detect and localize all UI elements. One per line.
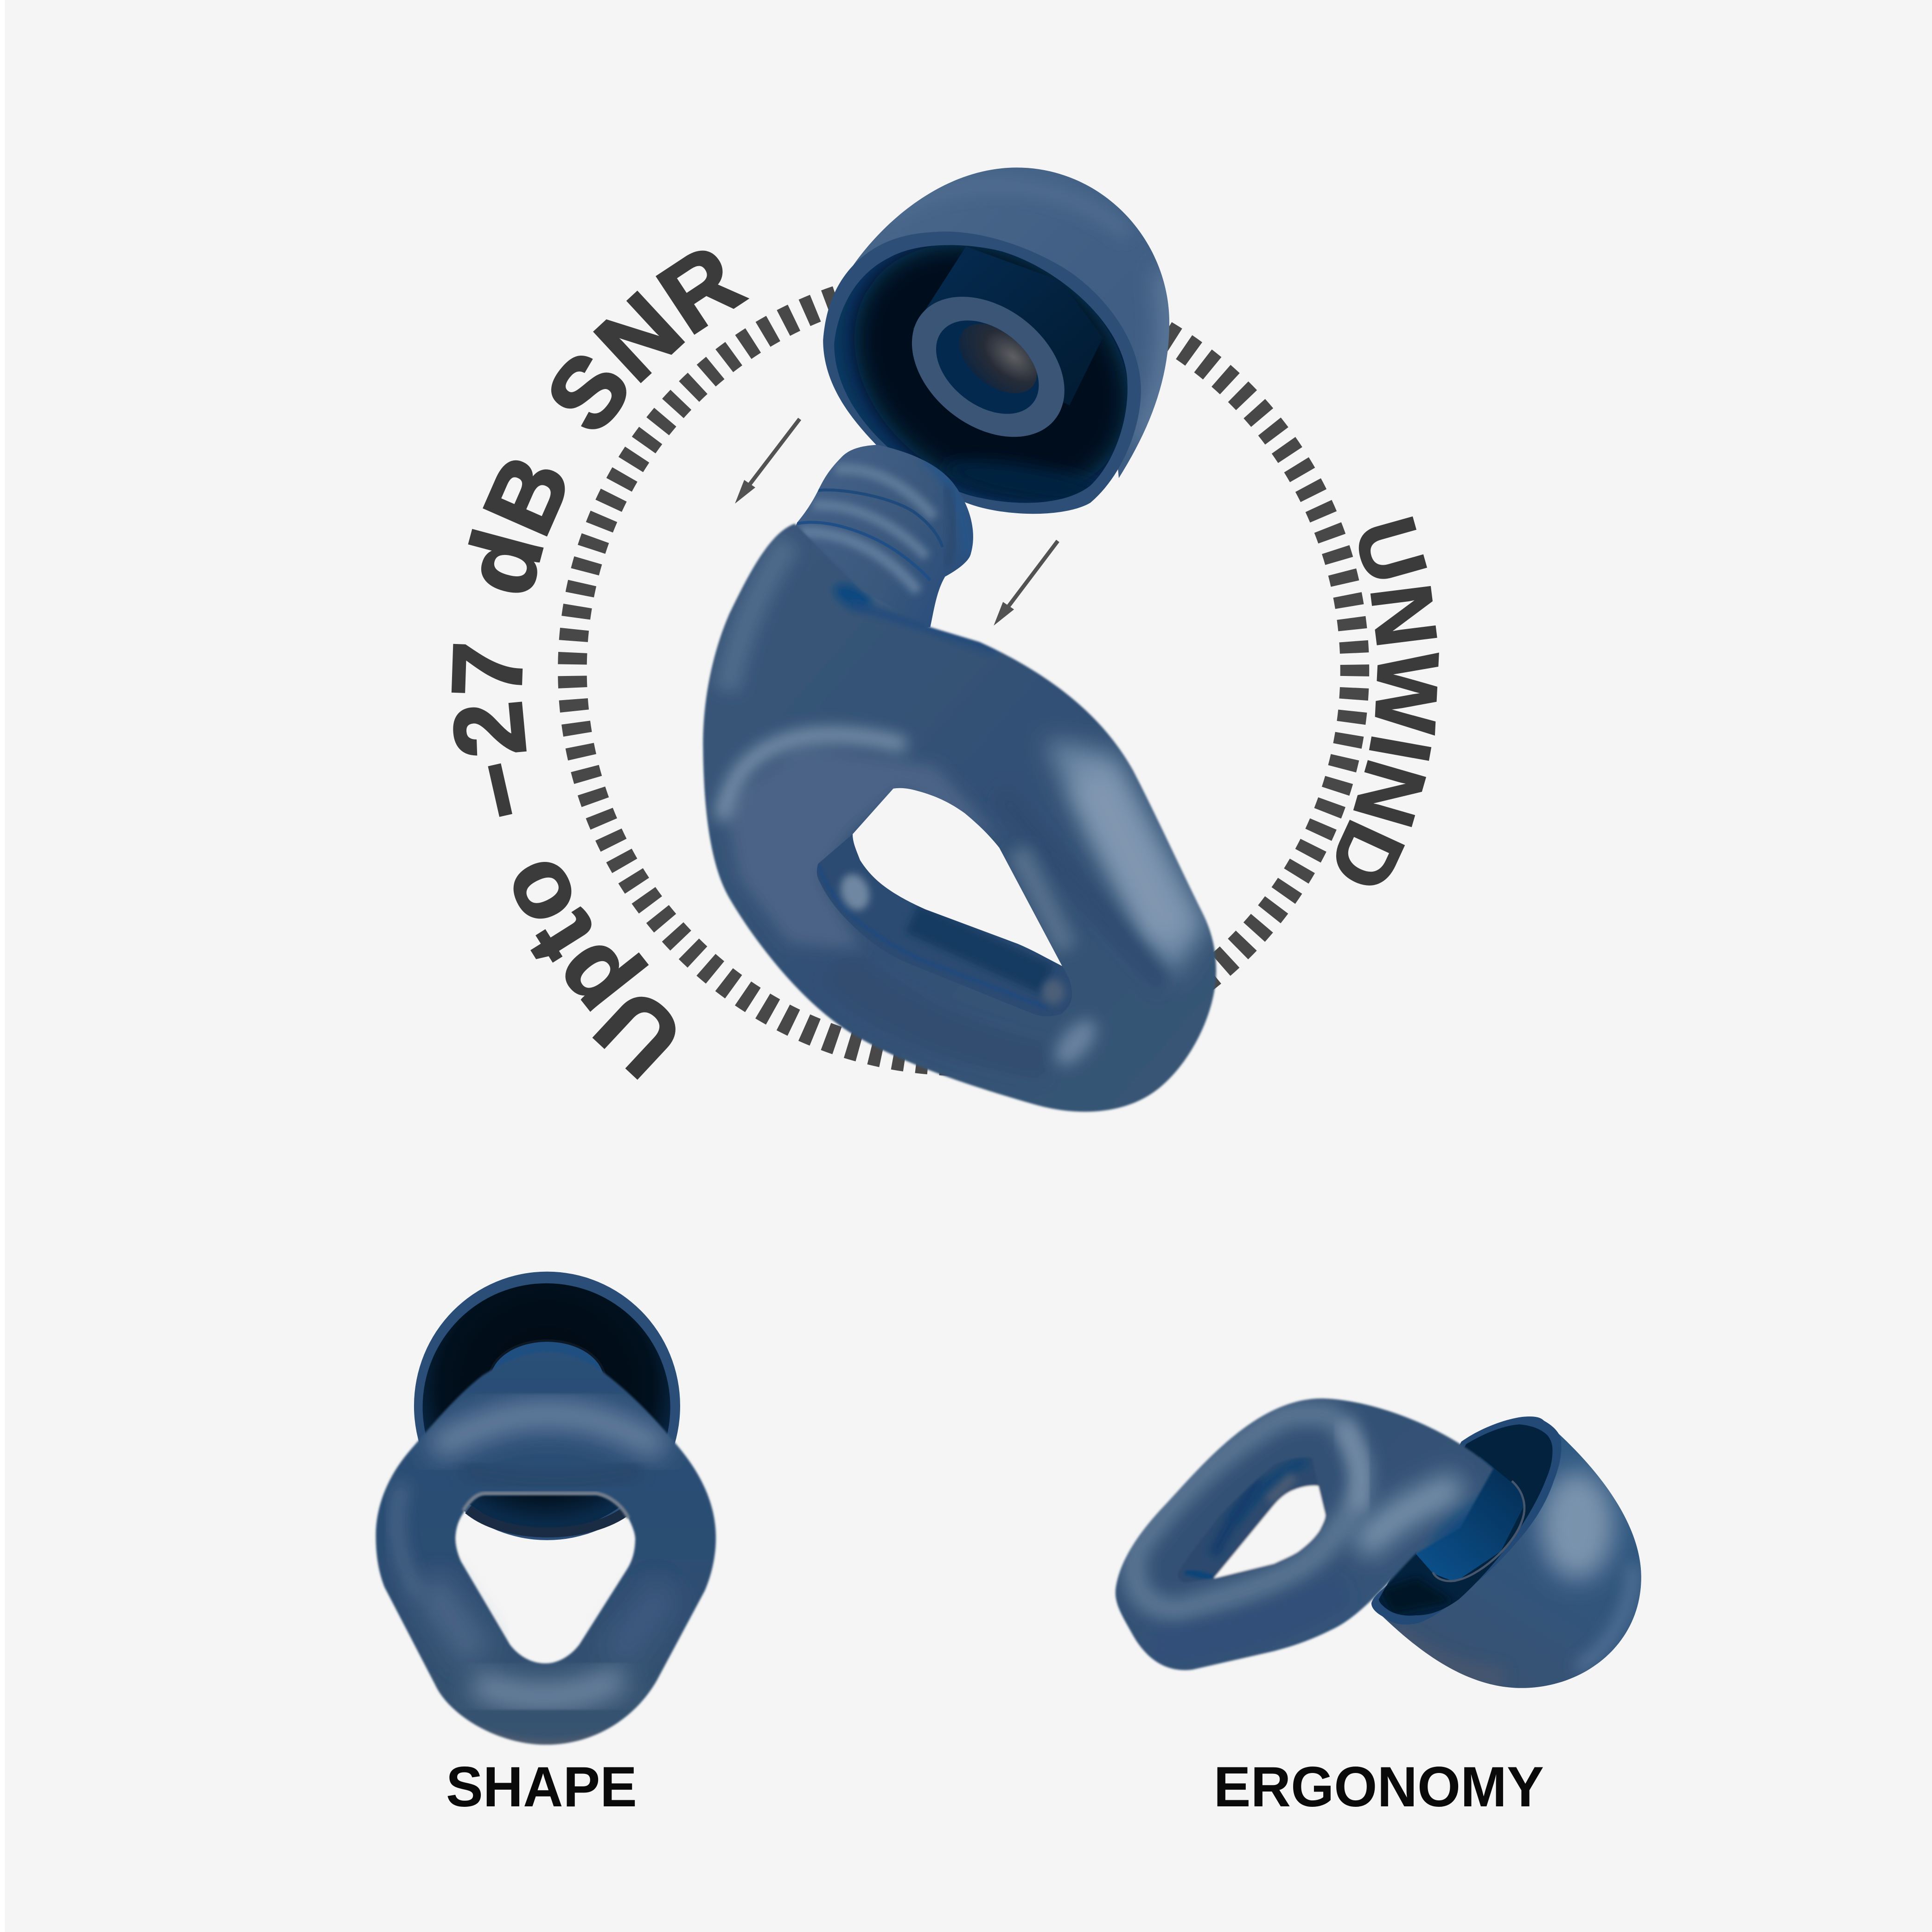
- loop lip highlight: [1134, 1414, 1362, 1610]
- threaded stem: [789, 445, 973, 628]
- hole top edge: [463, 1493, 628, 1518]
- interior: [1379, 1424, 1552, 1616]
- loop opening: [1214, 1486, 1326, 1578]
- left lobe: [725, 744, 1001, 951]
- lower face: [1152, 1589, 1343, 1645]
- ear tip dome: [840, 167, 1169, 478]
- inner stem: [489, 1340, 605, 1419]
- rim: [1371, 1416, 1562, 1625]
- loop inner wall: [1178, 1457, 1319, 1582]
- curved heading: Upto -27 dB SNR: Upto −27 dB SNR: [432, 223, 761, 1097]
- sound bore: [918, 301, 1057, 433]
- inner tube: [913, 247, 1103, 405]
- earplug loop opening: [817, 788, 1072, 1016]
- earplug body: [703, 523, 1216, 1112]
- tick ring: [572, 279, 1355, 1061]
- front loop: [376, 1352, 716, 1745]
- label: shape: SHAPE: [446, 1755, 637, 1818]
- lower band: [838, 967, 1047, 1062]
- label: ergonomy: ERGONOMY: [1214, 1755, 1544, 1818]
- ear tip: [823, 167, 1169, 514]
- ear tip: [1371, 1416, 1641, 1688]
- outer shoulder highlight: [1362, 1485, 1460, 1550]
- earplug view: shape: [376, 1272, 716, 1745]
- stem into tip: [1416, 1456, 1525, 1582]
- upper neck shading: [727, 542, 789, 690]
- sound bore ring: [885, 268, 1091, 466]
- dark blue junction: [1444, 1509, 1493, 1555]
- back ear tip: [414, 1272, 680, 1540]
- ear tip interior: [834, 245, 1128, 503]
- arrow: right insertion direction: [994, 541, 1058, 625]
- earplug view: ergonomy: [1116, 1398, 1641, 1688]
- inner wall: [817, 789, 1072, 1016]
- ear tip rim: [823, 231, 1141, 514]
- main product: exploded earplug: [703, 167, 1216, 1112]
- arrow: left insertion direction: [735, 419, 800, 504]
- curved heading: UNWIND: UNWIND: [1310, 507, 1456, 905]
- right facet: [1045, 740, 1207, 980]
- dome side: [1372, 1421, 1641, 1688]
- loop body: [1116, 1398, 1493, 1670]
- see-through opening: [853, 788, 1062, 966]
